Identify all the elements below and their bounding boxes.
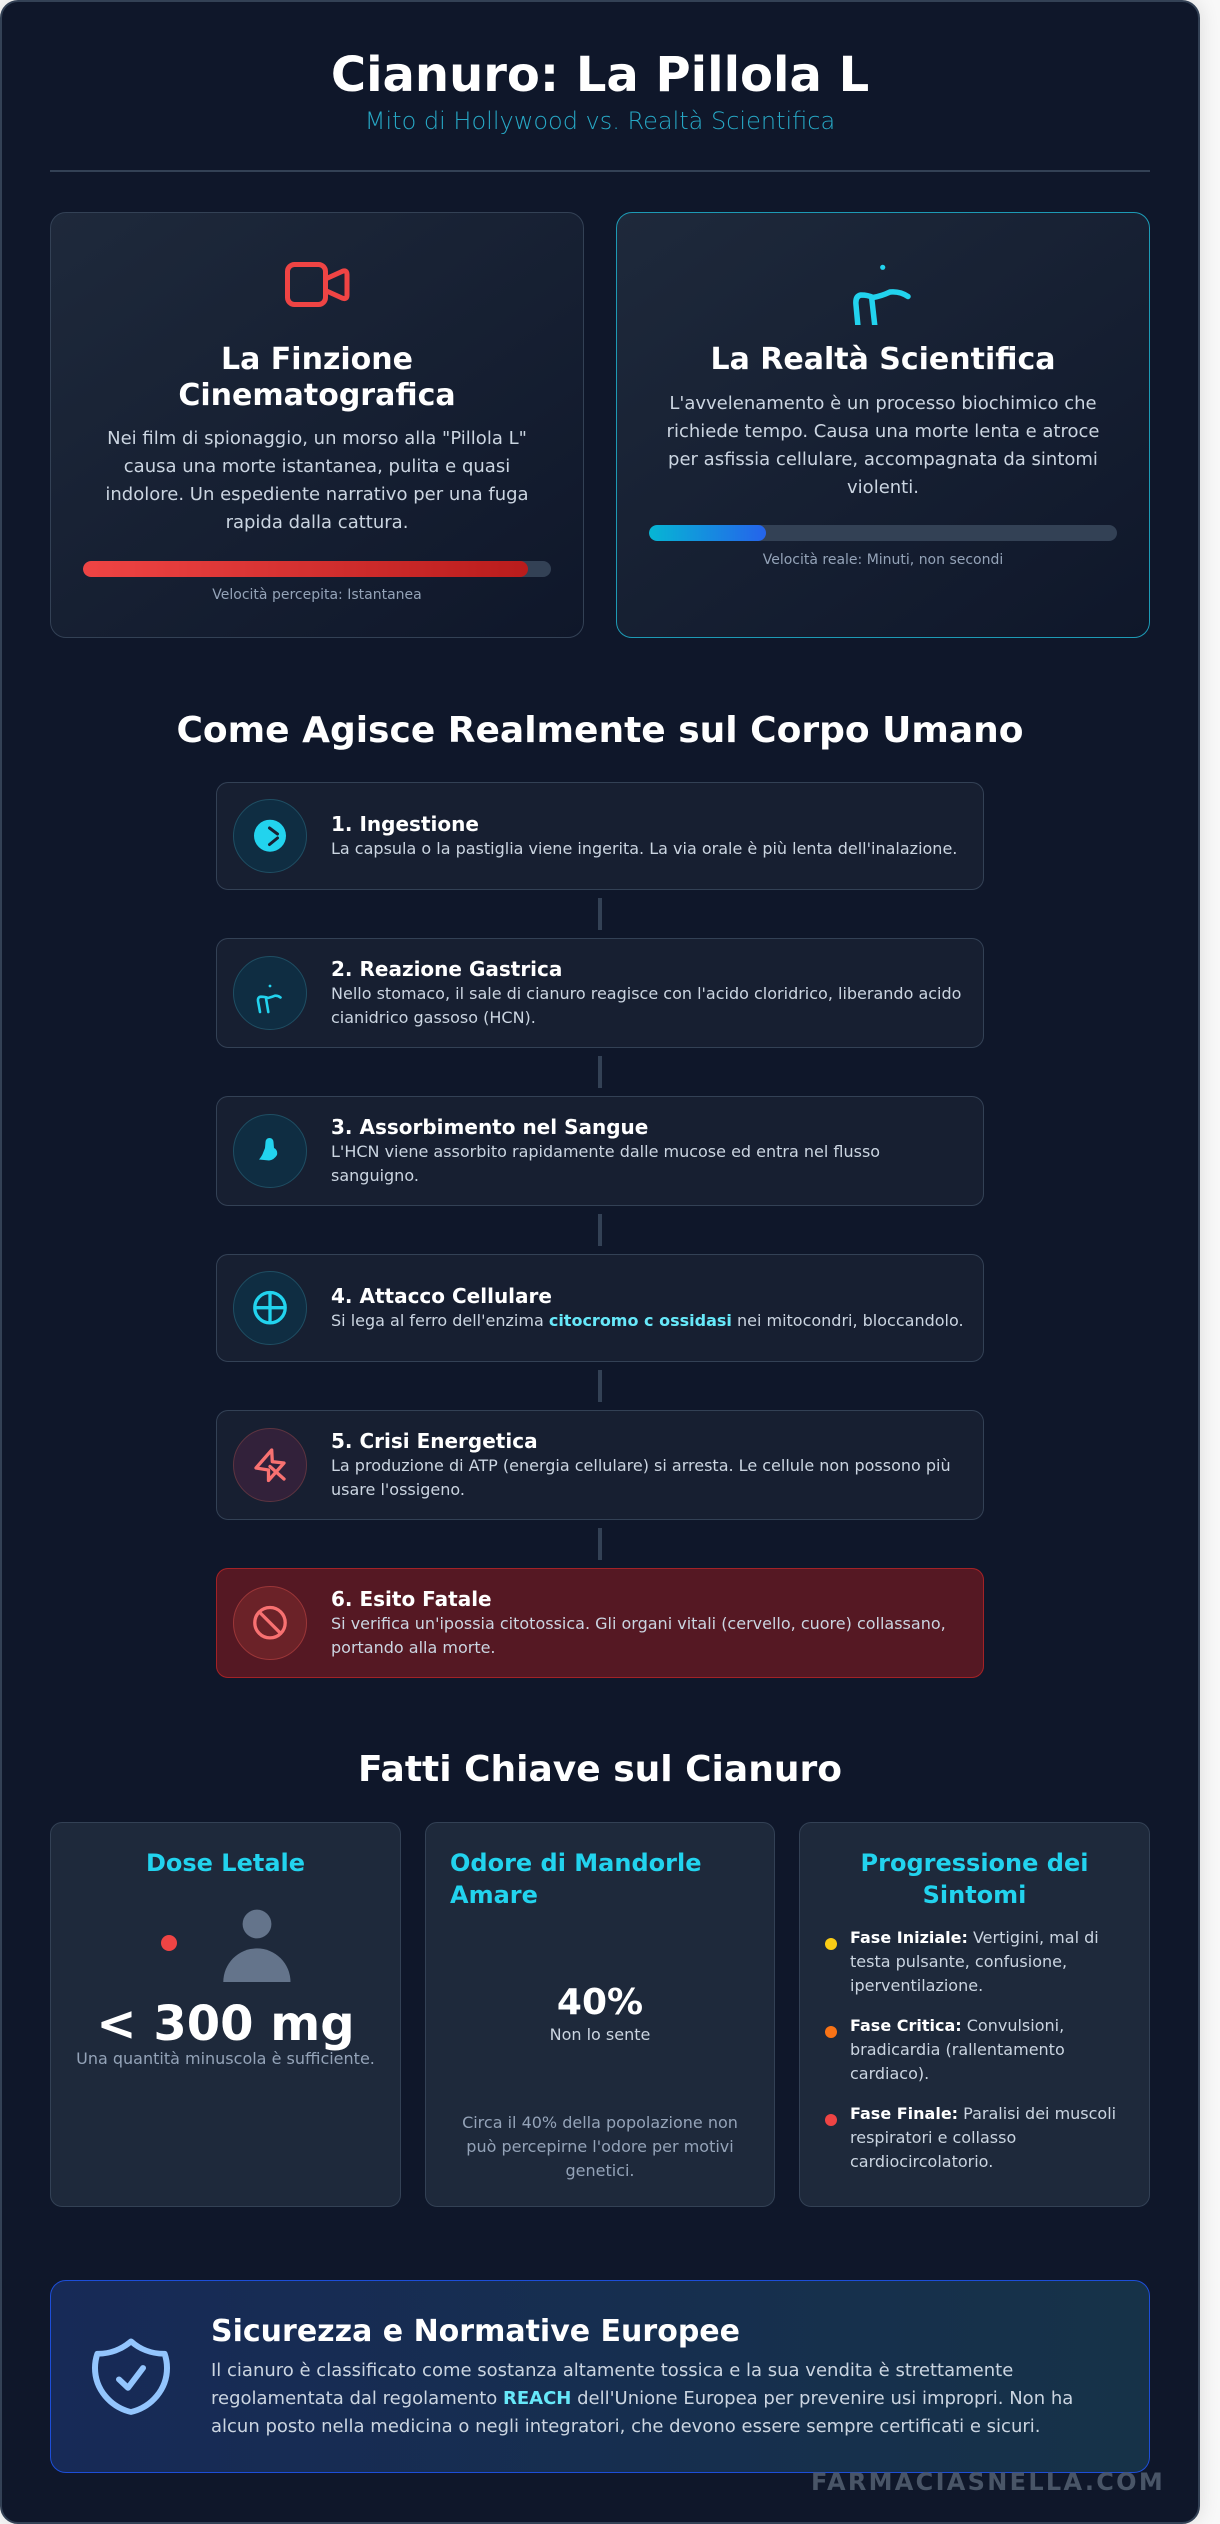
icon: person and dose dot	[161, 1910, 290, 1982]
text: safety: alcun posto nella medicina o negli integratori, che devono essere sempre certificati e sicuri.	[211, 2416, 1040, 2437]
step title: 4. Attacco Cellulare	[331, 1284, 552, 1308]
text: smell note	[462, 2113, 738, 2180]
percentage label: Non lo sente	[550, 2025, 650, 2044]
card title	[450, 1849, 701, 1909]
text: critical phase: bradicardia (rallentamento	[850, 2040, 1065, 2059]
heading: safety: Sicurezza e Normative Europee	[211, 2314, 740, 2349]
step text: sanguigno.	[331, 1166, 419, 1185]
text: fiction description: indolore. Un espediente narrativo per una fuga	[105, 484, 529, 505]
step text: Si lega al ferro dell'enzima citocromo c ossidasi nei mitocondri, bloccandolo.	[331, 1311, 964, 1330]
step text	[331, 984, 961, 1027]
text: fiction description	[105, 428, 529, 533]
text: safety	[211, 2360, 1073, 2437]
step text: cianidrico gassoso (HCN).	[331, 1008, 536, 1027]
text: safety: regolamentata dal regolamento REACH dell'Unione Europea per prevenire usi impropri. Non ha	[211, 2388, 1073, 2409]
step text	[331, 1614, 946, 1657]
text: reality description: per asfissia cellulare, accompagnata da sintomi	[668, 449, 1098, 470]
panel: reality	[616, 212, 1150, 638]
text: fiction description: Nei film di spionaggio, un morso alla "Pillola L"	[107, 428, 527, 449]
step title: 5. Crisi Energetica	[331, 1429, 538, 1453]
percentage value: 40%	[557, 1982, 643, 2023]
step 3	[216, 1096, 984, 1206]
icon: ban	[233, 1586, 307, 1660]
panel: almond smell	[425, 1822, 775, 2207]
text: final phase: Fase Finale: Paralisi dei muscoli	[850, 2104, 1116, 2123]
text: reality description	[667, 393, 1099, 498]
text: safety: Il cianuro è classificato come sostanza altamente tossica e la sua vendita è strettamente	[211, 2360, 1013, 2381]
panel: lethal dose	[50, 1822, 401, 2207]
step 5	[216, 1410, 984, 1520]
step title: 6. Esito Fatale	[331, 1587, 492, 1611]
step title: 3. Assorbimento nel Sangue	[331, 1115, 648, 1139]
panel: safety and regulations	[50, 2280, 1150, 2473]
text: smell note: genetici.	[565, 2161, 635, 2180]
panel: fiction	[50, 212, 584, 638]
card title	[861, 1849, 1088, 1909]
text: initial phase: Fase Iniziale: Vertigini, mal di	[850, 1928, 1099, 1947]
text: fiction description: rapida dalla cattura.	[226, 512, 408, 533]
step text	[331, 1456, 951, 1499]
step text: portando alla morte.	[331, 1638, 496, 1657]
title: Cianuro: La Pillola L	[331, 47, 869, 103]
icon: video camera	[285, 262, 350, 307]
step 1	[216, 782, 984, 890]
step text: La produzione di ATP (energia cellulare) si arresta. Le cellule non possono più	[331, 1456, 951, 1475]
text: smell note: Circa il 40% della popolazione non	[462, 2113, 738, 2132]
text: final phase: cardiocircolatorio.	[850, 2152, 993, 2171]
heading: reality: La Realtà Scientifica	[710, 342, 1056, 377]
subtitle: Mito di Hollywood vs. Realtà Scientifica	[365, 107, 835, 135]
heading: key facts: Fatti Chiave sul Cianuro	[358, 1749, 842, 1790]
panel: symptoms	[799, 1822, 1150, 2207]
text: final phase: respiratori e collasso	[850, 2128, 1016, 2147]
step text: usare l'ossigeno.	[331, 1480, 465, 1499]
heading: fiction: La Finzione	[221, 342, 413, 377]
step 2	[216, 938, 984, 1048]
heading: fiction	[178, 342, 456, 413]
step 4	[216, 1254, 984, 1362]
text: reality description: violenti.	[847, 477, 919, 498]
bar: perceived speed	[83, 561, 551, 577]
card title: Amare	[450, 1881, 538, 1909]
text: critical phase: Fase Critica: Convulsioni,	[850, 2016, 1064, 2035]
lethal dose value: < 300 mg	[96, 1996, 355, 2052]
icon: crosshair	[233, 1271, 307, 1345]
heading: how it acts: Come Agisce Realmente sul Corpo Umano	[176, 710, 1024, 751]
step title: 2. Reazione Gastrica	[331, 957, 562, 981]
step text: Nello stomaco, il sale di cianuro reagisce con l'acido cloridrico, liberando acido	[331, 984, 961, 1003]
step text: L'HCN viene assorbito rapidamente dalle mucose ed entra nel flusso	[331, 1142, 880, 1161]
bar: real speed	[649, 525, 1117, 541]
text: lethal dose note: Una quantità minuscola è sufficiente.	[76, 2049, 375, 2068]
text: final phase	[850, 2104, 1116, 2171]
bullet: critical phase	[825, 2026, 837, 2038]
step 6	[216, 1568, 984, 1678]
caption: perceived speed: Velocità percepita: Istantanea	[212, 587, 422, 603]
bullet: final phase	[825, 2114, 837, 2126]
step text	[331, 1142, 880, 1185]
text: critical phase: cardiaco).	[850, 2064, 929, 2083]
card title: Odore di Mandorle	[450, 1849, 701, 1877]
step text: La capsula o la pastiglia viene ingerita. La via orale è più lenta dell'inalazione.	[331, 839, 957, 858]
icon: energy crisis	[233, 1428, 307, 1502]
text: initial phase: testa pulsante, confusione,	[850, 1952, 1067, 1971]
text: reality description: richiede tempo. Causa una morte lenta e atroce	[667, 421, 1099, 442]
card title: Dose Letale	[146, 1849, 305, 1877]
icon: gastric reaction	[233, 956, 307, 1030]
card title: Progressione dei	[861, 1849, 1088, 1877]
step title: 1. Ingestione	[331, 812, 479, 836]
heading: fiction: Cinematografica	[178, 378, 456, 413]
text: fiction description: causa una morte istantanea, pulita e quasi	[124, 456, 510, 477]
caption: real speed: Velocità reale: Minuti, non secondi	[763, 552, 1003, 568]
text: critical phase	[850, 2016, 1065, 2083]
card title: Sintomi	[923, 1881, 1026, 1909]
bullet: initial phase	[825, 1938, 837, 1950]
icon: blood absorption	[233, 1114, 307, 1188]
text: initial phase	[850, 1928, 1099, 1995]
icon: stomach glyph	[853, 264, 911, 325]
text: smell note: può percepirne l'odore per motivi	[466, 2137, 734, 2156]
step text: Si verifica un'ipossia citotossica. Gli organi vitali (cervello, cuore) collassano,	[331, 1614, 946, 1633]
icon: ingestion	[233, 799, 307, 873]
watermark: FARMACIASNELLA.COM	[811, 2468, 1165, 2496]
text: reality description: L'avvelenamento è un processo biochimico che	[669, 393, 1097, 414]
icon: shield check	[92, 2338, 170, 2415]
text: initial phase: iperventilazione.	[850, 1976, 983, 1995]
